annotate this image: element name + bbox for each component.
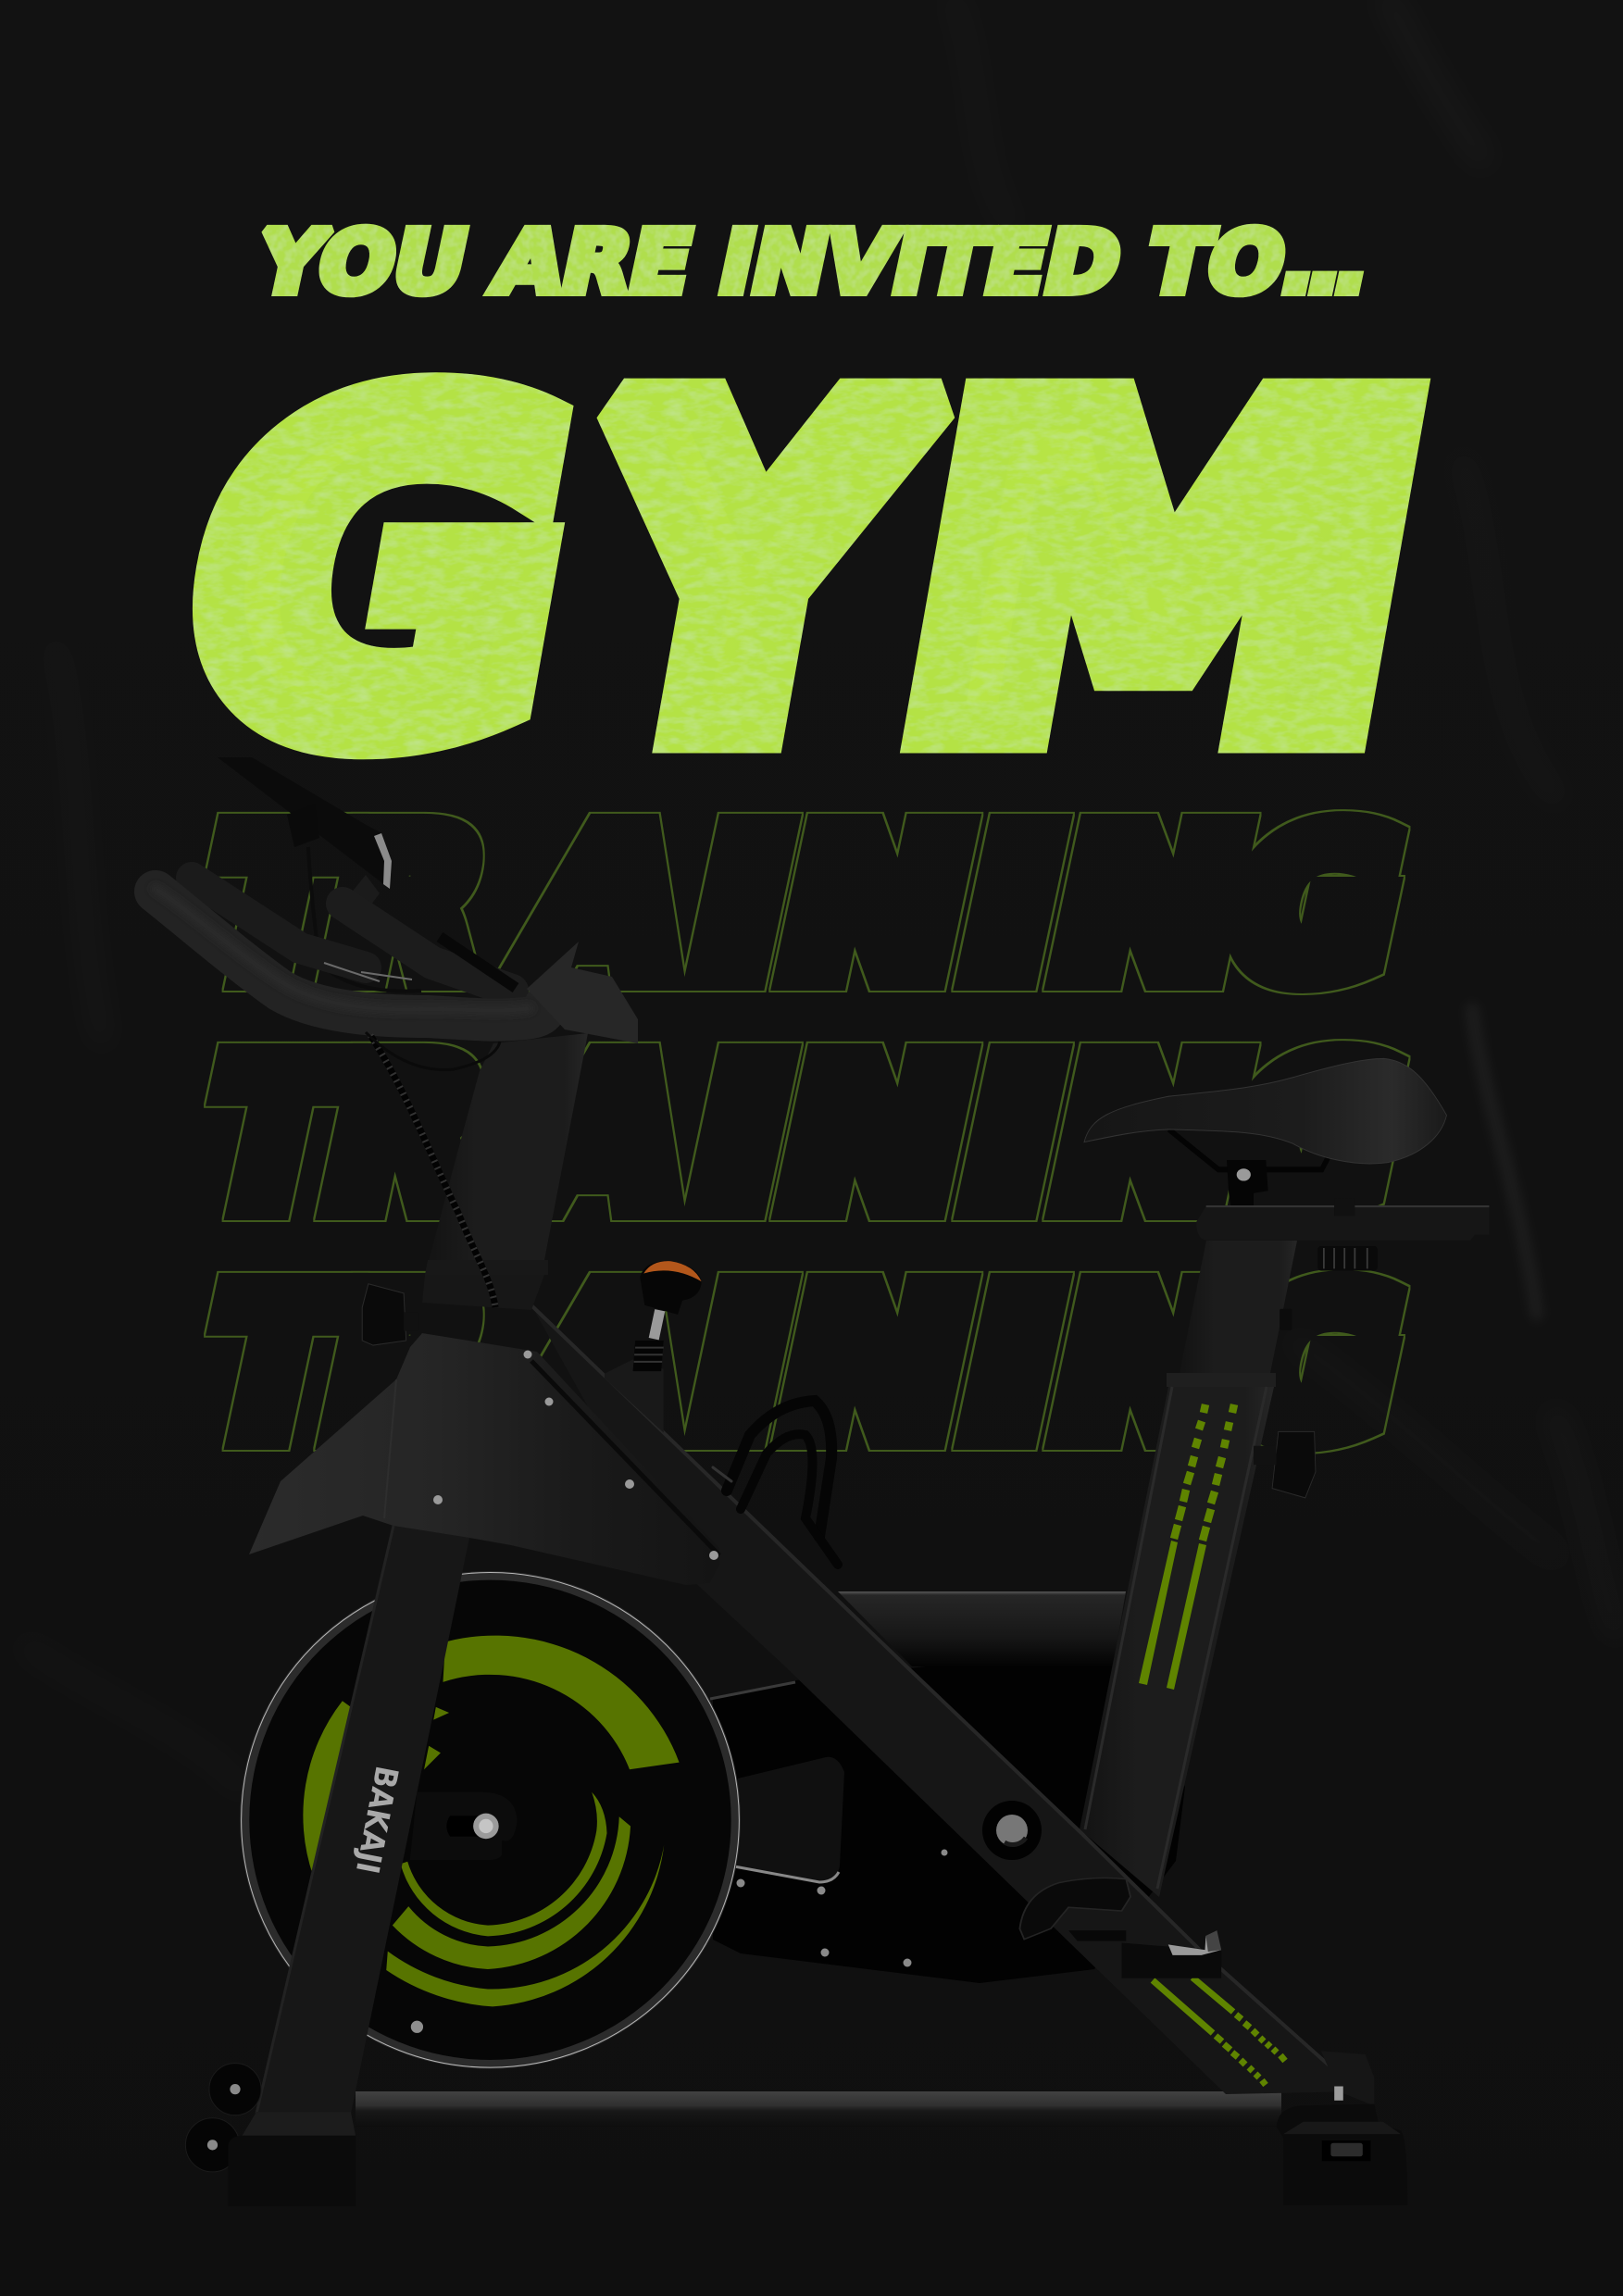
display tablet bbox=[218, 757, 392, 889]
brand label: BAKAJI bbox=[348, 1763, 406, 1877]
outlined TRAINING text, row 2: I bbox=[946, 1022, 1078, 1249]
outlined TRAINING text, row 1: I bbox=[946, 792, 1078, 1019]
outlined TRAINING text, row 2 bbox=[190, 1022, 1418, 1249]
outlined TRAINING text, row 3: T bbox=[190, 1252, 357, 1479]
outlined TRAINING text, row 3: G bbox=[1210, 1253, 1418, 1479]
handlebars and console bbox=[156, 757, 638, 1043]
rear bar bbox=[192, 878, 366, 967]
outlined TRAINING text, row 3 bbox=[190, 1252, 1418, 1479]
heading: GYM: G bbox=[153, 316, 608, 833]
inner bar bbox=[343, 904, 512, 991]
outlined TRAINING text, row 1: N bbox=[764, 792, 986, 1019]
adjuster wheel bbox=[1317, 1246, 1378, 1270]
outlined TRAINING text, row 1: A bbox=[506, 793, 705, 1019]
coiled cable bbox=[366, 1032, 500, 1307]
main grip bbox=[156, 892, 545, 1020]
rear foot bbox=[1277, 2051, 1407, 2205]
outlined TRAINING text, row 2: A bbox=[506, 1023, 705, 1249]
outlined TRAINING text, row 2: N bbox=[1037, 1022, 1265, 1249]
handlebar post bbox=[422, 1033, 588, 1310]
saddle bbox=[1084, 1058, 1446, 1164]
adjustment knob, left bbox=[362, 1284, 418, 1345]
base bar bbox=[356, 2091, 1281, 2127]
horizontal slider bbox=[1196, 1206, 1489, 1241]
outlined TRAINING text, row 2: G bbox=[1210, 1023, 1418, 1249]
exercise bike illustration bbox=[156, 757, 1489, 2206]
main diagonal frame bbox=[531, 1305, 1358, 2094]
outlined TRAINING text, row 1: G bbox=[1210, 793, 1418, 1019]
crossbar tube bbox=[838, 1591, 1126, 1666]
outlined TRAINING text, row 3: N bbox=[1037, 1252, 1265, 1479]
front leg with brand name bbox=[256, 1526, 469, 2114]
outlined TRAINING text, row 3: N bbox=[764, 1252, 986, 1479]
saddle rail and clamp bbox=[1168, 1129, 1328, 1169]
bottle cage bbox=[713, 1401, 838, 1565]
green stripes on seat tube bbox=[1139, 1404, 1234, 1690]
outlined TRAINING text, row 2: T bbox=[190, 1022, 357, 1249]
head cap bbox=[527, 942, 638, 1043]
outlined TRAINING text, row 3: R bbox=[308, 1253, 502, 1479]
cables bbox=[308, 847, 421, 992]
seat assembly bbox=[1084, 1058, 1489, 1498]
outlined TRAINING text, row 2: R bbox=[308, 1023, 502, 1249]
outlined TRAINING text, row 1: I bbox=[675, 792, 806, 1019]
outlined TRAINING text, row 3: I bbox=[946, 1252, 1078, 1479]
outlined TRAINING text, row 2: N bbox=[764, 1022, 986, 1249]
outlined TRAINING text, row 1: R bbox=[308, 793, 502, 1019]
heading: GYM: Y bbox=[542, 316, 953, 832]
green stripes on lower frame bbox=[1153, 1978, 1285, 2085]
shroud bbox=[249, 1333, 719, 1585]
seat tube bbox=[1080, 1241, 1297, 1897]
heading: GYM bbox=[153, 315, 1459, 833]
outlined TRAINING text, row 2: I bbox=[675, 1022, 806, 1249]
pedal and crank bbox=[1019, 1878, 1221, 1978]
outlined TRAINING text, row 3: I bbox=[675, 1252, 806, 1479]
outlined TRAINING text, row 1: T bbox=[190, 792, 357, 1019]
seat height knob bbox=[1272, 1431, 1316, 1498]
outlined TRAINING text, row 1: N bbox=[1037, 792, 1265, 1019]
black motor casing bbox=[710, 1666, 1185, 1983]
outlined TRAINING text, row 1 bbox=[190, 792, 1418, 1019]
resistance knob bbox=[605, 1261, 702, 1432]
heading: you are invited to: YOU ARE INVITED TO... bbox=[248, 214, 1374, 312]
axle bracket bbox=[410, 1792, 518, 1860]
heading: GYM: M bbox=[868, 315, 1459, 833]
casters and front foot bbox=[185, 2064, 356, 2206]
flywheel with green graphic bbox=[240, 1571, 741, 2069]
outlined TRAINING text, row 3: A bbox=[506, 1253, 705, 1479]
